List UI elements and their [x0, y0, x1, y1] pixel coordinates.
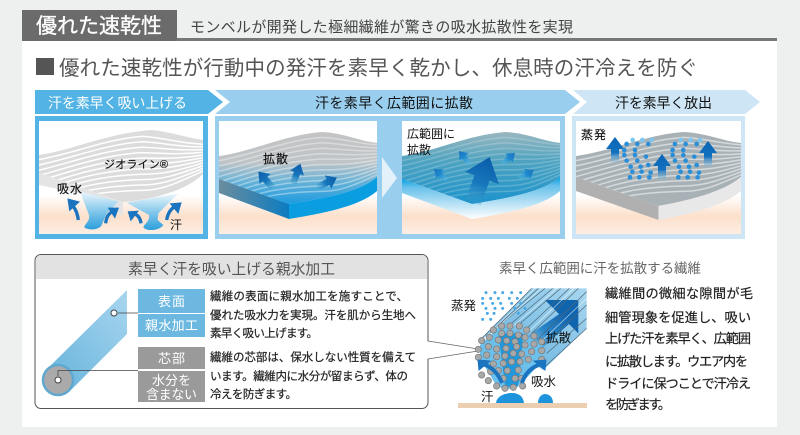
fiber illustration heading: 素早く広範囲に汗を拡散する繊維: [499, 261, 702, 276]
main heading: 優れた速乾性が行動中の発汗を素早く乾かし、休息時の汗冷えを防ぐ: [59, 57, 698, 80]
text: fiber description: 上げた汗を素早く、広範囲: [605, 331, 751, 346]
panel: absorb: [34, 116, 209, 239]
panel: hydrophilic treatment: [35, 254, 478, 408]
panel: release: [571, 116, 753, 239]
icon: small arrows: [430, 147, 537, 184]
panel title bar: 素早く汗を吸い上げる親水加工: [128, 261, 335, 278]
fiber diagram: [43, 290, 138, 395]
label: surface: 親水加工: [145, 318, 198, 333]
header title box: [22, 10, 177, 41]
labels: 吸水: [531, 375, 556, 389]
text: surface description: 優れた吸水力を実現。汗を肌から生地へ: [210, 308, 416, 322]
text: fiber description: ドライに保つことで汗冷え: [605, 376, 751, 391]
text: core description: います。繊維内に水分が留まらず、体の: [210, 369, 408, 383]
step arrow 2: 汗を素早く広範囲に拡散: [315, 95, 473, 111]
label: evaporation: 蒸発: [581, 128, 606, 142]
labels: 拡散: [546, 330, 571, 345]
text: core description: 冷えを防ぎます。: [210, 387, 297, 401]
step arrow 1: 汗を素早く吸い上げる: [48, 95, 187, 111]
text: surface description: 繊維の表面に親水加工を施すことで、: [210, 289, 408, 303]
icon: sweat drops: [496, 393, 553, 403]
callout gap: [426, 341, 478, 359]
cross-section fibers: [475, 323, 545, 391]
label: absorption: 吸水: [57, 182, 82, 196]
panel: diffuse: [214, 116, 572, 239]
header subtitle: モンベルが開発した極細繊維が驚きの吸水拡散性を実現: [190, 19, 573, 36]
header title box: 優れた速乾性: [36, 15, 162, 38]
label: core: 含まない: [146, 387, 197, 402]
fabric surface: [34, 130, 209, 216]
icon: arrows: [253, 161, 340, 194]
labels: 蒸発: [451, 299, 476, 313]
text: surface description: 素早く吸い上げます。: [210, 327, 318, 340]
icon: arrow heads: [67, 198, 182, 221]
arrow between diffusion stages: [382, 157, 397, 198]
skin line: [458, 403, 587, 408]
fiber bundle: [480, 288, 587, 391]
fabric stage 2: [402, 128, 560, 234]
step arrow 3: [573, 90, 760, 114]
step arrow 2: [215, 90, 580, 114]
label: sweat: 汗: [170, 218, 182, 232]
panel title bar: [36, 255, 427, 279]
fabric stage 1: [214, 132, 389, 234]
step arrow 1: [35, 90, 223, 114]
label: wide diffusion: 広範囲に: [407, 126, 455, 141]
labels: 汗: [481, 390, 494, 404]
header rule: [22, 38, 777, 41]
label: surface: [138, 289, 205, 337]
text: fiber description: 細管現象を促進し、吸い: [605, 310, 751, 325]
label: Geoline: ジオライン®: [104, 158, 168, 171]
label: core: 水分を: [152, 373, 191, 388]
text: fiber description: に拡散します。ウエア内を: [605, 354, 748, 369]
icon: evaporation dots: [622, 138, 702, 180]
evaporation dots: [481, 291, 526, 321]
text: fiber description: 繊維間の微細な隙間が毛: [605, 286, 753, 301]
icon: wicking arrows: [478, 360, 546, 383]
wicking water: [71, 192, 178, 230]
icon: large arrow: [456, 151, 507, 208]
label: diffusion: 拡散: [263, 151, 288, 166]
fiber illustration: [451, 288, 587, 408]
fabric: [571, 132, 753, 220]
label: wide diffusion: 拡散: [407, 142, 431, 157]
label: surface: 表面: [158, 294, 185, 309]
section header: [22, 10, 777, 41]
icon: wicking arrows: [71, 204, 176, 223]
step arrow 3: 汗を素早く放出: [615, 95, 712, 111]
callout lines: [428, 341, 478, 359]
text: fiber description: を防ぎます。: [605, 397, 671, 412]
label: core: 芯部: [158, 351, 185, 366]
text: core description: 繊維の芯部は、保水しない性質を備えて: [210, 350, 416, 364]
labels: [451, 299, 571, 404]
label: core: [138, 347, 205, 402]
icon: rising arrows: [606, 137, 717, 180]
